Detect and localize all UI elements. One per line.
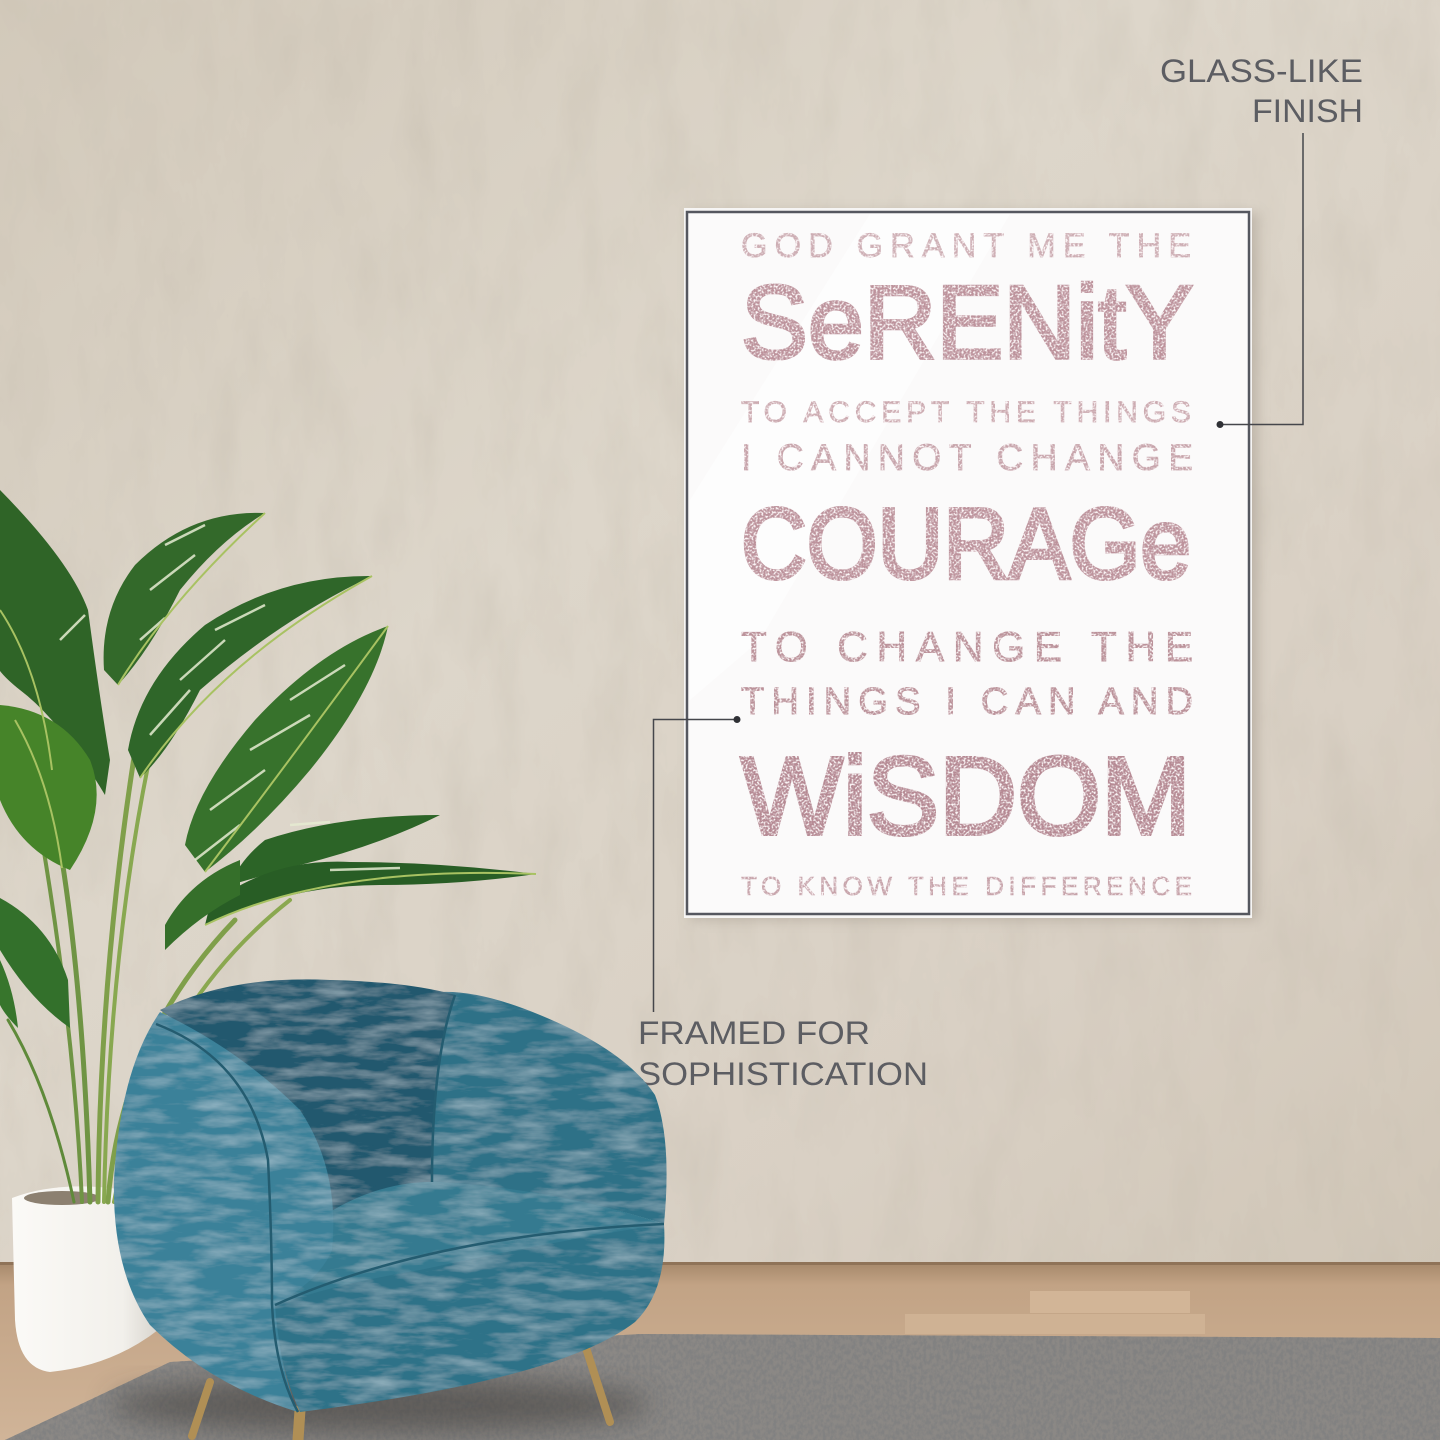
callout: framed for sophistication: SOPHISTICATION (638, 1056, 928, 1092)
wooden floor (0, 1262, 1440, 1440)
leaf midribs (0, 513, 536, 925)
quote: things i can and: THINGS I CAN AND (741, 681, 1193, 723)
chair body (272, 1224, 664, 1412)
quote: god grant me the: GOD GRANT ME THE (741, 227, 1191, 265)
leaf (128, 576, 372, 778)
framed art print (684, 208, 1258, 920)
chair piping seams (156, 995, 664, 1412)
leaf (185, 626, 388, 872)
plant: stems (8, 670, 290, 1202)
leaf (0, 898, 70, 1028)
leaf (0, 960, 18, 1028)
chair left arm (114, 1012, 333, 1412)
plant pot (12, 1186, 170, 1372)
armchair shadow (110, 1377, 650, 1433)
leader line: glass-like finish (1216, 133, 1303, 428)
chair backrest inner (160, 979, 455, 1240)
grey shag rug (5, 1334, 1440, 1440)
quote: wisdom: WiSDOM (741, 735, 1191, 858)
leader line: framed for sophistication (654, 716, 740, 1012)
quote: i cannot change: I CANNOT CHANGE (741, 437, 1193, 478)
leaf (0, 705, 97, 870)
leaf (104, 513, 265, 685)
leaf stripes (60, 525, 400, 870)
chair legs (192, 1348, 610, 1440)
quote: to accept the things: TO ACCEPT THE THINGS (741, 396, 1191, 429)
callout: framed for sophistication: FRAMED FOR (638, 1015, 870, 1051)
quote: to know the difference: TO KNOW THE DIFFERENCE (741, 871, 1192, 901)
plant: leaves (0, 485, 536, 1028)
armchair (114, 979, 667, 1440)
quote: to change the: TO CHANGE THE (741, 623, 1193, 670)
callout: glass-like finish: FINISH (1252, 93, 1363, 129)
callout: glass-like finish: GLASS-LIKE (1160, 53, 1363, 89)
callout: framed for sophistication (638, 1015, 928, 1092)
leaf (0, 485, 110, 795)
quote: serenity: SeRENitY (741, 265, 1193, 381)
chair backrest outer right (420, 992, 667, 1224)
callout: glass-like finish (1160, 53, 1363, 129)
leaf (230, 815, 440, 885)
chair seat cushion (275, 1182, 664, 1306)
leaf (205, 862, 536, 925)
quote: courage: COURAGe (741, 488, 1191, 600)
leaf (165, 860, 240, 950)
